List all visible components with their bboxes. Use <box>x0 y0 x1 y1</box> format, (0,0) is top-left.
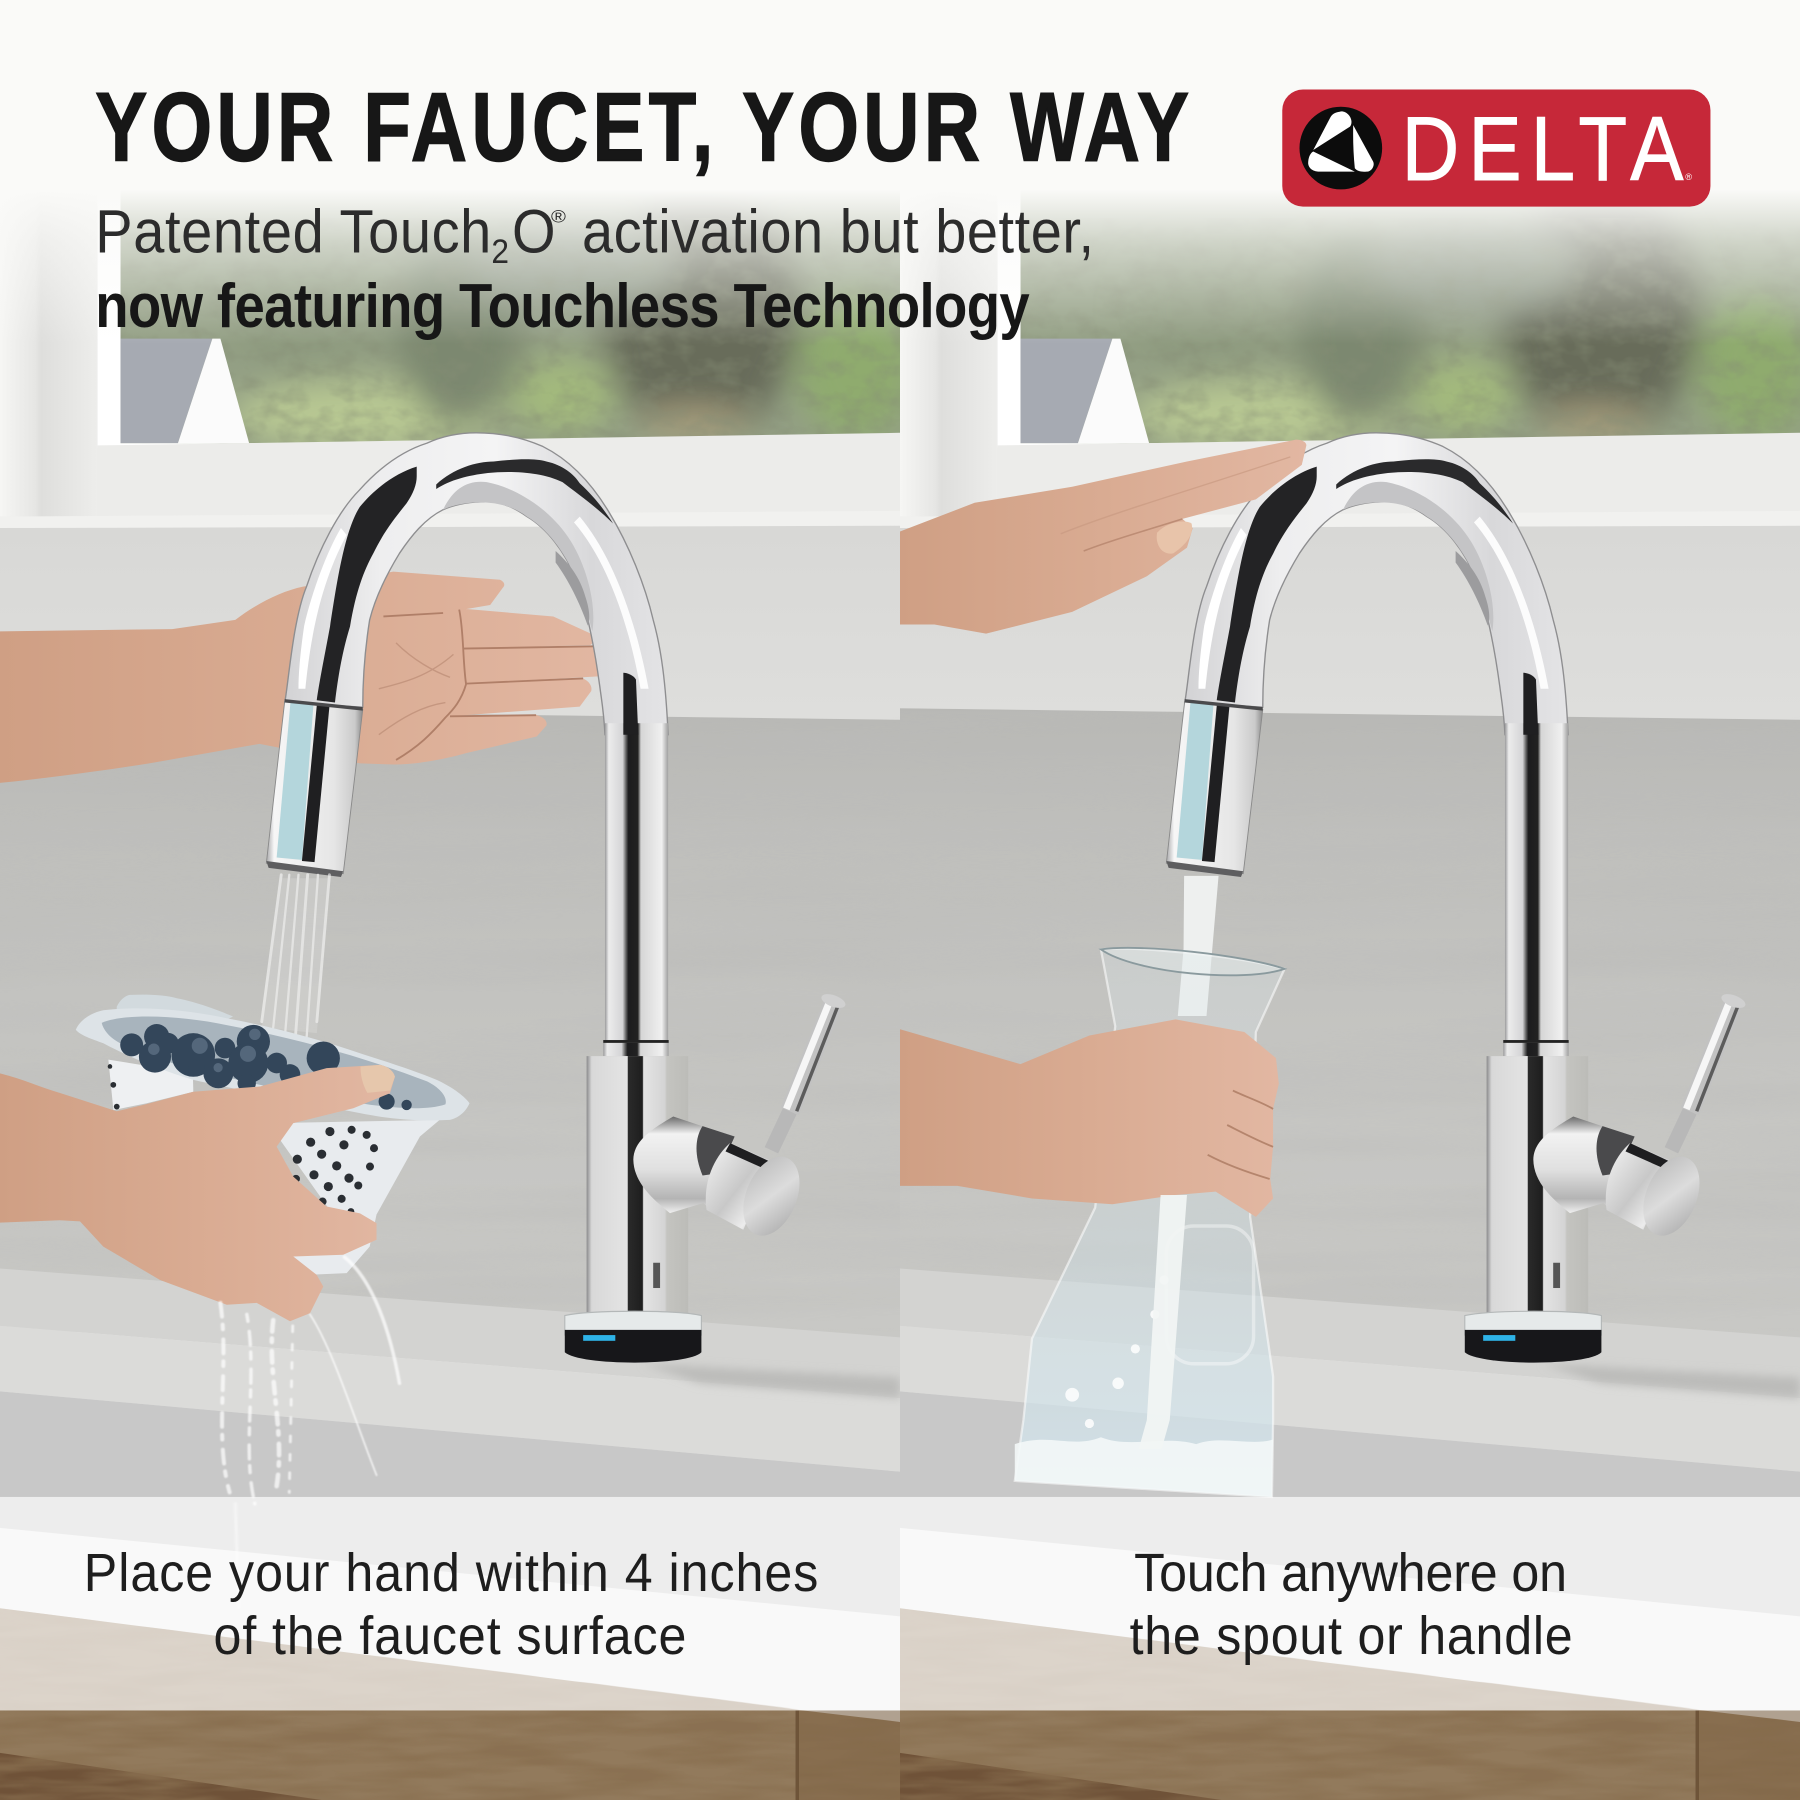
caption: left panel: of the faucet surface <box>214 1607 686 1667</box>
hand: gripping carafe <box>900 1019 1279 1217</box>
stream below hand <box>1139 1195 1187 1449</box>
logo wordmark: DELTA <box>1402 100 1684 200</box>
kitchen background: window, wall, counter <box>900 198 1800 1800</box>
glass carafe filling with water <box>1015 948 1285 1497</box>
panel: right scene, hand touching spout <box>900 198 1800 1800</box>
hand: fingertips on top of spout <box>900 440 1306 634</box>
icon: Delta triangle emblem <box>1299 107 1382 189</box>
colander with blueberries <box>76 995 470 1275</box>
water stream into carafe <box>1178 876 1219 1016</box>
top fade over the window <box>0 0 1800 344</box>
caption: left panel <box>84 1543 818 1667</box>
water dripping from colander <box>218 1256 402 1505</box>
kitchen background: window, wall, counter <box>0 196 900 1800</box>
subtitle line 1: ® <box>551 207 566 227</box>
caption band <box>0 1497 1800 1710</box>
caption: left panel: Place your hand within 4 inches <box>84 1543 818 1603</box>
subtitle line 1: 2 <box>491 233 509 271</box>
subtitle line 1: activation but better, <box>582 198 1094 266</box>
blueberries <box>120 1024 412 1110</box>
panel: left scene, hand near faucet <box>0 196 900 1800</box>
subtitle line 2: now featuring Touchless Technology <box>95 272 1030 341</box>
colander holes <box>108 1064 378 1215</box>
hand: gripping colander <box>0 1065 395 1321</box>
Delta logo badge <box>1282 90 1710 207</box>
Delta logo badge: ® <box>1685 172 1692 182</box>
subtitle line 1: Patented Touch <box>95 198 491 266</box>
hand: open palm hovering near spout <box>0 572 610 783</box>
faucet: chrome pull-down with touch base <box>1166 433 1747 1363</box>
title: YOUR FAUCET, YOUR WAY <box>95 72 1189 182</box>
caption: right panel: Touch anywhere on <box>1134 1543 1567 1603</box>
subtitle line 1: O <box>512 198 556 266</box>
water spray from aerator <box>262 875 329 1042</box>
caption: right panel: the spout or handle <box>1130 1607 1573 1667</box>
caption: right panel <box>1130 1543 1573 1667</box>
faucet: chrome pull-down with touch base <box>266 433 847 1363</box>
subtitle line 1 <box>95 198 1094 271</box>
